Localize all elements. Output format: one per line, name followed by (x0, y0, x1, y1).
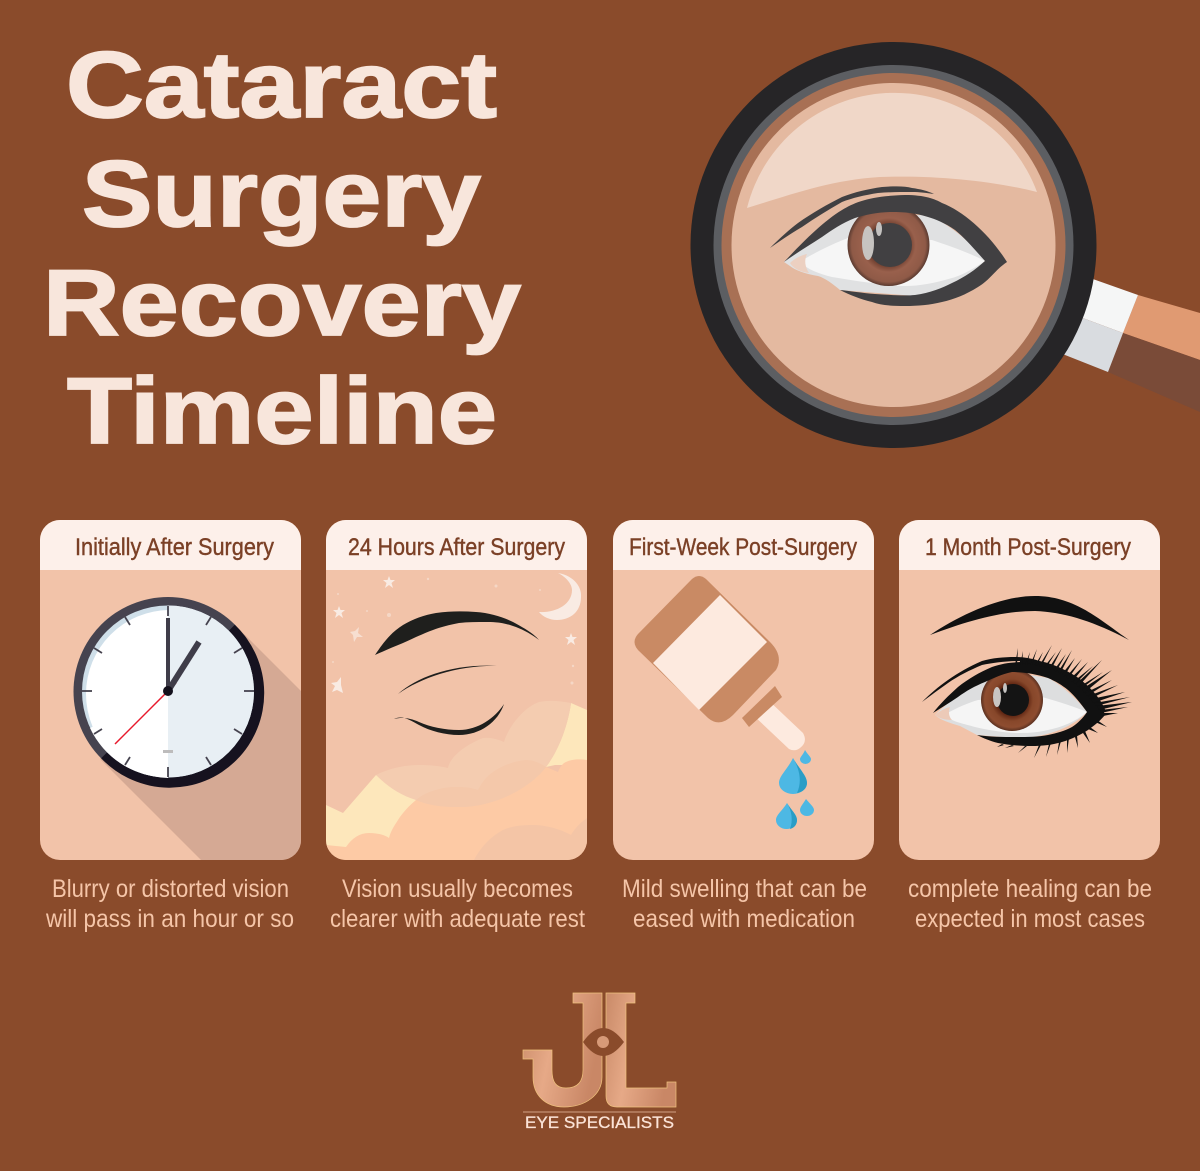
icon: stars (331, 576, 577, 693)
description: Blurry or distorted vision (52, 875, 289, 903)
panel header (40, 520, 301, 570)
description: complete healing can be (908, 875, 1152, 903)
panel: one month post-surgery (899, 520, 1160, 933)
icon: eye drop bottle (634, 576, 805, 750)
panel: first week post-surgery (613, 520, 874, 933)
description (45, 875, 294, 933)
icon: moon (539, 573, 581, 620)
icon: healed eye (922, 596, 1132, 758)
clock shadow (100, 624, 301, 860)
heading: First-Week Post-Surgery (629, 534, 857, 561)
description (908, 875, 1152, 933)
eyelashes (997, 645, 1132, 758)
title: Cataract (66, 32, 497, 137)
panel header (326, 520, 587, 570)
title: Timeline (67, 358, 497, 463)
lens highlight (747, 93, 1037, 208)
magnifier rim (690, 42, 1096, 448)
title: Recovery (43, 250, 521, 355)
heading: Initially After Surgery (75, 534, 274, 561)
description: eased with medication (633, 905, 855, 933)
magnified eye (770, 186, 1007, 306)
description: clearer with adequate rest (330, 905, 585, 933)
icon: magnifying glass with eye (690, 42, 1200, 448)
description: Mild swelling that can be (622, 875, 867, 903)
logo wordmark: EYE SPECIALISTS (525, 1113, 674, 1132)
panel header (899, 520, 1160, 570)
magnifier handle (1060, 278, 1200, 412)
panel header (613, 520, 874, 570)
heading: 1 Month Post-Surgery (925, 534, 1131, 561)
night clouds (326, 701, 587, 860)
panel: initially after surgery (40, 520, 301, 933)
description: will pass in an hour or so (45, 905, 294, 933)
icon: wall clock (74, 597, 264, 788)
panel: 24 hours after surgery (326, 520, 587, 933)
logo letter L (606, 993, 676, 1107)
eyebrow (930, 596, 1129, 640)
description (330, 875, 585, 933)
description: Vision usually becomes (342, 875, 573, 903)
title (43, 32, 521, 463)
heading: 24 Hours After Surgery (348, 534, 565, 561)
icon: drops (776, 750, 814, 829)
description (622, 875, 867, 933)
title: Surgery (82, 141, 481, 246)
logo: JL Eye Specialists (523, 993, 676, 1132)
logo eye (583, 1028, 624, 1056)
description: expected in most cases (915, 905, 1145, 933)
logo letter J (523, 993, 602, 1107)
icon: closed eye (375, 611, 539, 735)
